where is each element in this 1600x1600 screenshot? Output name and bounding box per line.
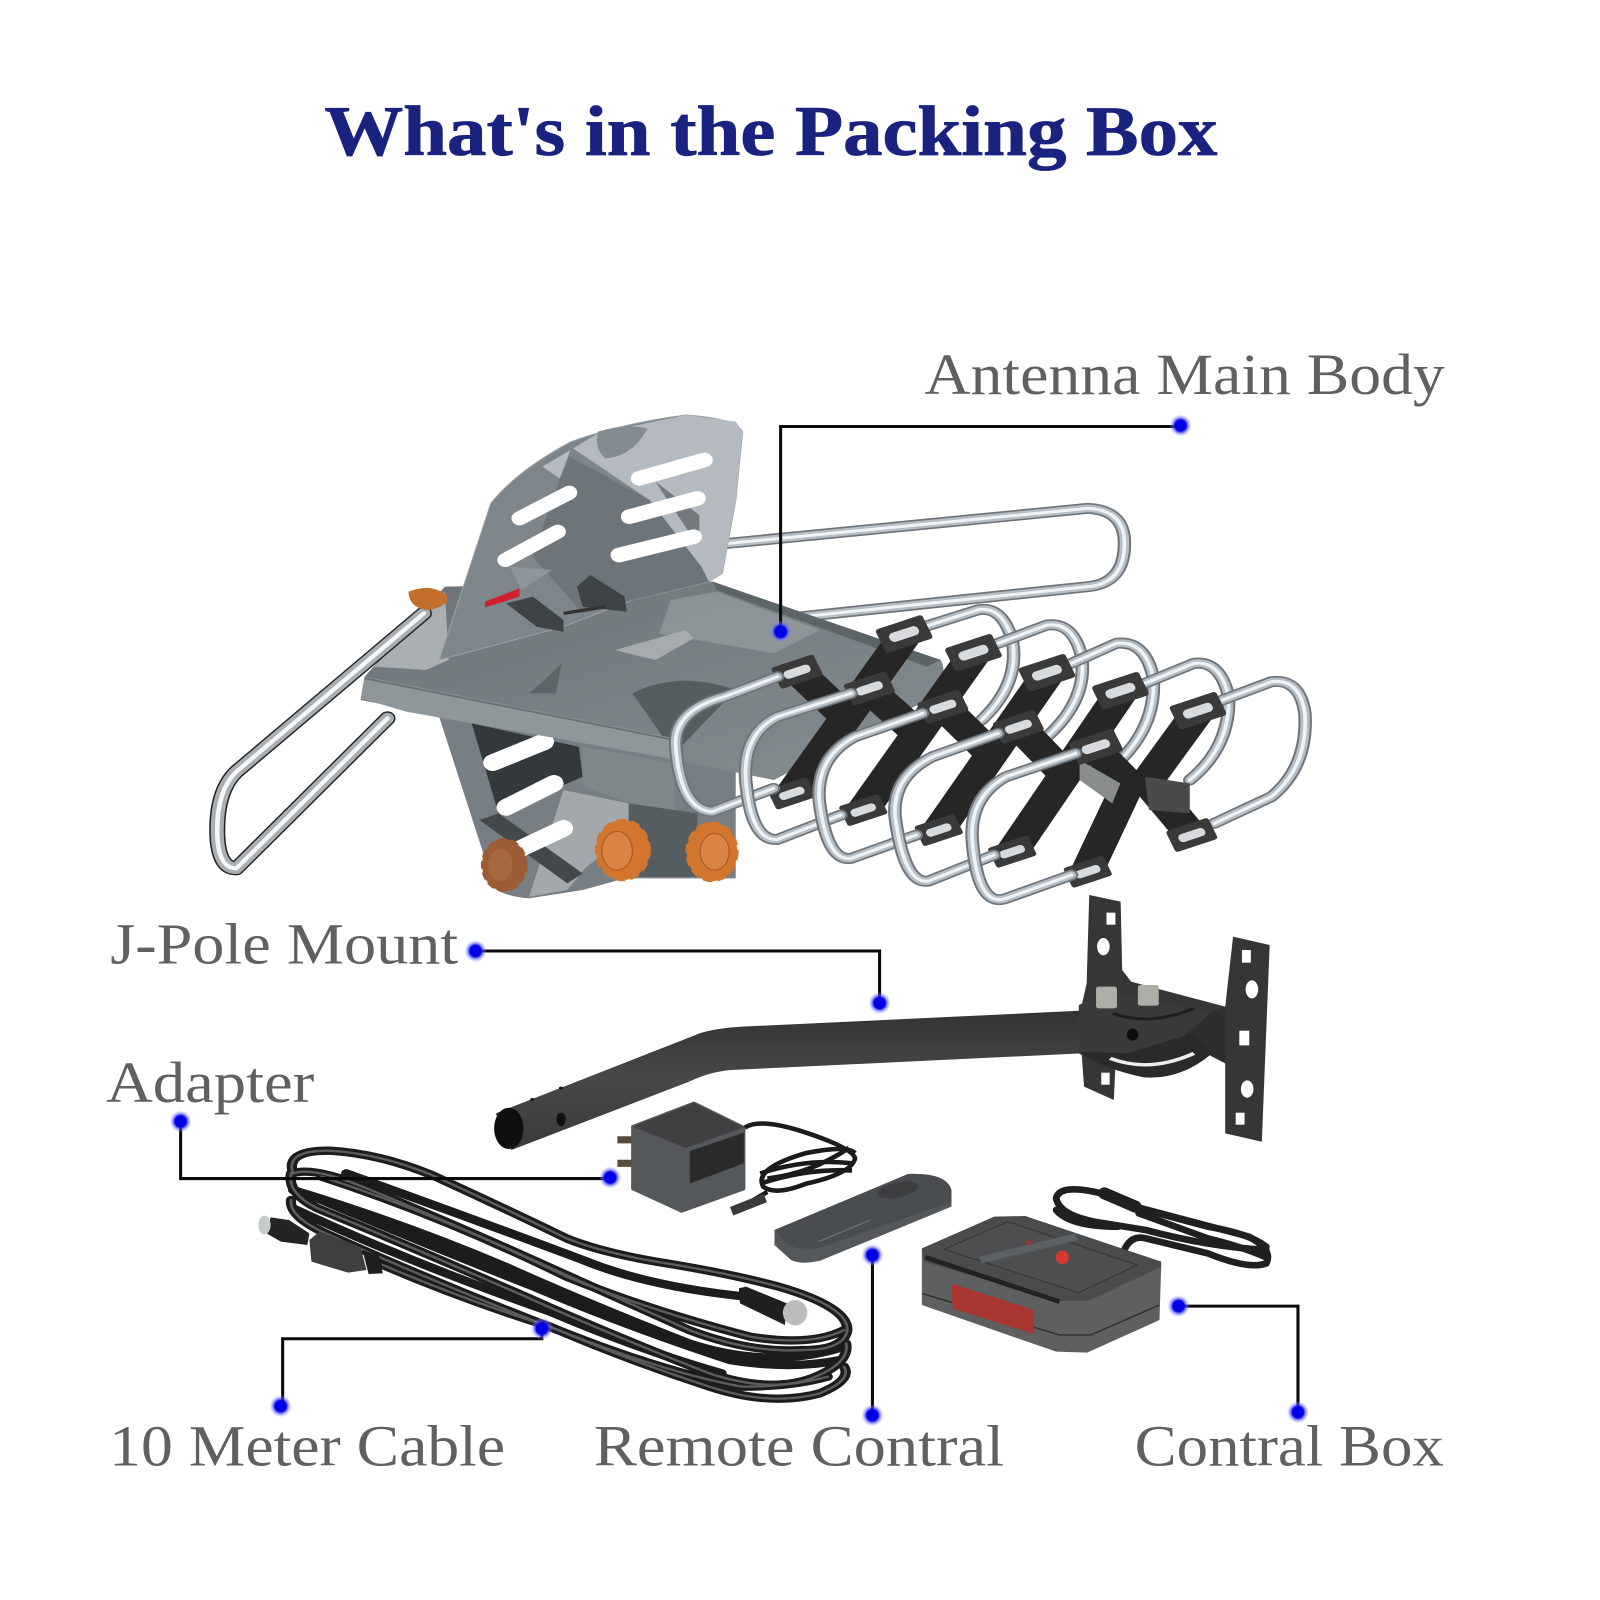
title: What's in the Packing Box: [324, 92, 1218, 171]
callout: 10 meter cable: [109, 1317, 553, 1478]
tray: [361, 582, 943, 780]
callout: j-pole mount: [110, 911, 891, 1014]
adapter cord: [745, 1123, 855, 1202]
left connector: [267, 1217, 309, 1245]
prongs: [617, 1140, 633, 1163]
knob left: [482, 839, 526, 891]
callout: remote control: [594, 1244, 1004, 1478]
callout: adapter: [106, 1050, 621, 1189]
callout: control box: Contral Box: [1135, 1413, 1444, 1478]
dipole rings and holders: [676, 609, 1305, 900]
pivot bracket: [1079, 992, 1212, 1053]
control box: [922, 1189, 1268, 1353]
knob small: [409, 588, 448, 610]
element 3: [819, 643, 1153, 859]
lower bracket plate with knobs: [439, 717, 737, 898]
callout: antenna main body: Antenna Main Body: [924, 342, 1445, 407]
rear dipole ring: [729, 508, 1124, 617]
callout: 10 meter cable: 10 Meter Cable: [109, 1413, 505, 1478]
tube: [496, 1011, 1081, 1150]
J-pole mount: [494, 895, 1270, 1150]
adapter body: [633, 1103, 744, 1211]
back plate: [439, 415, 743, 660]
bolts: [1096, 987, 1117, 1008]
box cord: [1056, 1189, 1268, 1265]
callout: antenna main body: [769, 342, 1445, 643]
adapter: [617, 1103, 855, 1211]
plate holes: [1097, 913, 1258, 1125]
element 1: [676, 609, 1014, 812]
element 4: [895, 663, 1229, 881]
plug: [732, 1198, 765, 1211]
callout: j-pole mount: J-Pole Mount: [110, 911, 458, 976]
wall plates: [1081, 895, 1270, 1142]
red panel: [951, 1283, 1034, 1334]
left chrome handle: [217, 588, 448, 868]
callout: control box: [1135, 1295, 1444, 1478]
knob right: [687, 822, 737, 881]
right connector: [739, 1287, 787, 1325]
callout: remote control: Remote Contral: [594, 1413, 1004, 1478]
cable: [258, 1151, 847, 1399]
knob centre: [596, 820, 650, 880]
callout: adapter: Adapter: [106, 1050, 314, 1115]
button: [1056, 1251, 1069, 1264]
pivot underside: [1079, 1033, 1212, 1078]
element 5: [972, 681, 1305, 900]
antenna main body: [217, 415, 1305, 900]
remote control: [774, 1174, 951, 1263]
box body: [922, 1248, 1161, 1353]
element 2: [745, 625, 1082, 839]
